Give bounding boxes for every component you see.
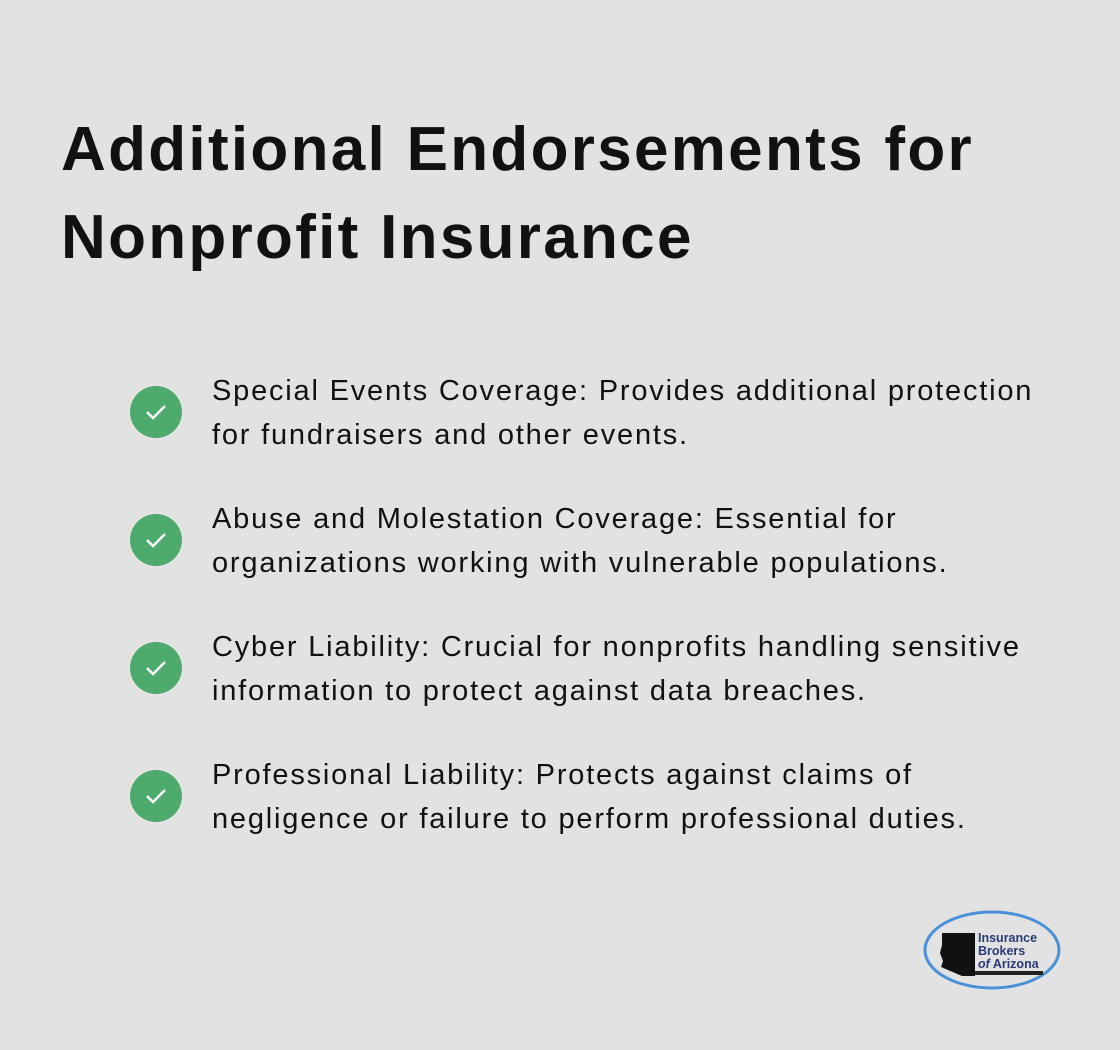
logo	[924, 910, 1060, 990]
text: professional: Professional Liability: Protects against claims of	[212, 759, 913, 791]
text: cyber: information to protect against data breaches.	[212, 675, 867, 707]
icon: check	[130, 386, 182, 438]
item: cyber	[130, 631, 1021, 707]
logo: Insurance	[978, 931, 1037, 945]
icon: check	[130, 770, 182, 822]
logo: Brokers	[978, 944, 1025, 958]
text: cyber: Cyber Liability: Crucial for nonprofits handling sensitive	[212, 631, 1021, 663]
text: professional: negligence or failure to perform professional duties.	[212, 803, 967, 835]
icon: check	[130, 514, 182, 566]
text: abuse: organizations working with vulnerable populations.	[212, 547, 948, 579]
item: professional	[130, 759, 967, 835]
title: Nonprofit Insurance	[61, 203, 694, 272]
text: special events: Special Events Coverage: Provides additional protection	[212, 375, 1033, 407]
text: cyber	[212, 631, 1021, 707]
text: abuse: Abuse and Molestation Coverage: Essential for	[212, 503, 898, 535]
item: special events	[130, 375, 1033, 451]
title	[61, 115, 974, 272]
logo: of Arizona	[978, 957, 1040, 971]
text: special events	[212, 375, 1033, 451]
item: abuse	[130, 503, 948, 579]
text: professional	[212, 759, 967, 835]
text: special events: for fundraisers and other events.	[212, 419, 689, 451]
text: abuse	[212, 503, 948, 579]
title: Additional Endorsements for	[61, 115, 974, 184]
icon: check	[130, 642, 182, 694]
